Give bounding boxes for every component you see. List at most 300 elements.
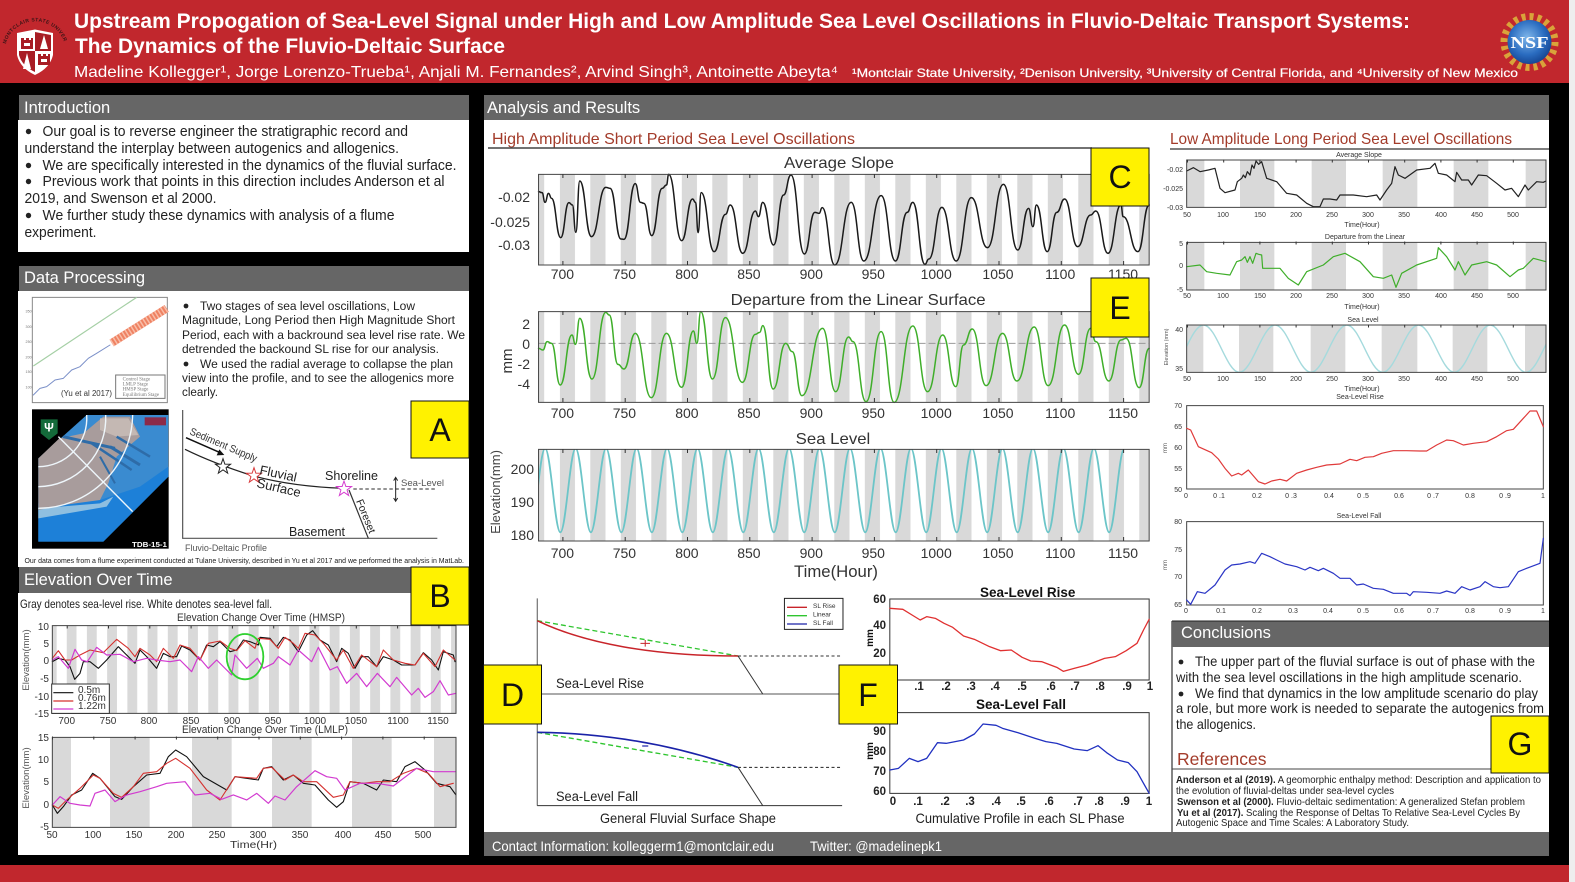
chart: sea level high amplitude: 750 [613, 545, 636, 561]
diagram: fluvio-deltaic profile: Basement [289, 524, 345, 539]
chart: average slope low amplitude: 200 [1290, 212, 1302, 219]
chart: average slope high amplitude [490, 155, 1149, 282]
chart: sea level high amplitude: Time(Hour) [794, 563, 878, 581]
text: conclusions bullets: the allogenics. [1176, 717, 1256, 732]
text: introduction bullets: Previous work that points in this direction includes Anderson et al [42, 174, 444, 190]
diagram: fluvio-deltaic profile: Sea-Level [401, 478, 444, 489]
chart: departure from the linear low amplitude: 50 [1183, 293, 1191, 300]
text: data processing bullets: clearly. [182, 385, 218, 399]
heading: introduction: Introduction [24, 99, 110, 117]
chart: elevation change LMLP: 100 [85, 830, 102, 841]
panel: conclusions and references [1172, 621, 1549, 832]
text: introduction bullets [24, 124, 456, 241]
text: introduction bullets: experiment. [24, 225, 96, 241]
chart: cumulative profile sea-level rise: .6 [1046, 681, 1056, 693]
title: Upstream Propogation of Sea-Level Signal under High and Low Amplitude Sea Level Oscillations in Fluvio-Deltaic Transport Systems: [74, 9, 1410, 33]
chart: departure from the linear low amplitude: 100 [1217, 293, 1229, 300]
text: conclusions bullets [1175, 654, 1544, 732]
contact bar [484, 832, 1549, 856]
chart: average slope low amplitude: 150 [1254, 212, 1266, 219]
text: data processing bullets: Two stages of sea level oscillations, Low [200, 299, 415, 313]
chart: sea level low amplitude: 50 [1183, 376, 1191, 383]
chart: sea-level rise low amplitude: 0 .3 [1285, 493, 1297, 500]
diagram: general fluvial surface shape: General Fluvial Surface Shape [600, 810, 776, 826]
text: conclusions bullets: a role, but more work is needed to separate the autogenics from [1176, 701, 1544, 716]
chart: sea level low amplitude: 450 [1471, 376, 1483, 383]
chart: cumulative profile sea-level fall [865, 697, 1153, 808]
diagram: general fluvial surface shape: Sea-Level Fall [556, 789, 638, 804]
logo: Montclair State University [2, 18, 67, 75]
chart: departure from the linear surface: Departure from the Linear Surface [731, 292, 986, 309]
chart: average slope high amplitude: 1050 [982, 266, 1014, 282]
diagram: fluvio-deltaic profile: Fluvio-Deltaic Profile [185, 543, 267, 553]
chart: departure from the linear surface: mm [499, 348, 516, 374]
diagram: fluvio-deltaic profile [183, 410, 444, 553]
chart: departure from the linear low amplitude: 250 [1326, 293, 1338, 300]
chart: sea level high amplitude: Sea Level [796, 431, 870, 448]
chart: elevation change HMSP: 10 [38, 622, 49, 633]
chart: cumulative profile sea-level fall: .6 [1044, 796, 1054, 808]
chart: sea level high amplitude: 200 [511, 461, 534, 477]
chart: sea level high amplitude: 1000 [921, 545, 952, 561]
chart: sea-level fall low amplitude [1163, 513, 1545, 615]
chart: elevation change LMLP: Elevation(mm) [21, 747, 32, 809]
chart: elevation change HMSP: -5 [40, 674, 49, 685]
chart: elevation change HMSP: 900 [224, 716, 241, 727]
chart: sea-level fall low amplitude: 0 .7 [1427, 608, 1439, 615]
chart: sea level stages (Yu et al 2017): 250 [26, 340, 32, 344]
diagram: general fluvial surface shape: SL Rise [813, 603, 836, 610]
text: references list: the evolution of fluvial-deltas under sea-level cycles [1176, 786, 1394, 797]
chart: elevation change HMSP: 1000 [304, 716, 327, 727]
chart: departure from the linear low amplitude: -5 [1177, 287, 1183, 294]
chart: average slope high amplitude: -0.02 [498, 189, 530, 205]
chart: cumulative profile sea-level rise: .1 [914, 681, 924, 693]
chart: departure from the linear surface: 1100 [1045, 405, 1075, 421]
label box G: G [1508, 726, 1532, 762]
chart: sea-level rise low amplitude: 0.4 [1324, 493, 1334, 500]
chart: elevation change HMSP: 0 [43, 656, 49, 667]
chart: departure from the linear surface: 700 [551, 405, 574, 421]
chart: elevation change LMLP [21, 724, 456, 851]
chart: departure from the linear surface: 2 [522, 316, 530, 332]
chart: cumulative profile sea-level fall: 90 [873, 726, 886, 738]
top banner [0, 0, 1569, 83]
chart: sea-level rise low amplitude: 0 .9 [1499, 493, 1511, 500]
chart: cumulative profile sea-level fall: .1 [913, 796, 923, 808]
chart: elevation change LMLP: 50 [46, 830, 58, 841]
chart: sea-level rise low amplitude: 60 [1174, 445, 1182, 452]
chart: sea level high amplitude: 180 [511, 527, 534, 543]
chart: departure from the linear low amplitude: Time(Hour) [1344, 304, 1380, 311]
chart: sea level high amplitude [488, 431, 1149, 581]
chart: average slope low amplitude: 450 [1471, 212, 1483, 219]
chart: average slope high amplitude: 900 [800, 266, 823, 282]
chart: departure from the linear surface: 750 [613, 405, 636, 421]
chart: sea level high amplitude: 850 [737, 545, 761, 561]
chart: average slope high amplitude: 1150 [1108, 266, 1138, 282]
chart: sea level low amplitude: 400 [1435, 376, 1447, 383]
label box F: F [858, 677, 878, 713]
chart: sea level low amplitude: Sea Level [1347, 317, 1379, 324]
chart: cumulative profile sea-level fall: .8 [1094, 796, 1104, 808]
panel: introduction [18, 95, 469, 252]
chart: departure from the linear surface: 950 [862, 405, 885, 421]
chart: cumulative profile sea-level rise: 1 [1147, 681, 1154, 693]
chart: average slope high amplitude: 850 [737, 266, 761, 282]
chart: sea-level fall low amplitude: 0.6 [1394, 608, 1404, 615]
chart: sea-level fall low amplitude: 0.1 [1216, 608, 1226, 615]
chart: cumulative profile sea-level rise: Sea-Level Rise [980, 585, 1076, 600]
chart: sea-level rise low amplitude: 50 [1174, 487, 1182, 494]
chart: sea-level fall low amplitude: 0.2 [1252, 608, 1262, 615]
chart: departure from the linear surface: 900 [800, 405, 823, 421]
chart: sea-level rise low amplitude: 65 [1174, 424, 1182, 431]
chart: elevation change LMLP: 200 [168, 830, 185, 841]
photo: flume experiment plan view: Ψ [44, 421, 54, 435]
heading: introduction [19, 95, 469, 120]
chart: cumulative profile sea-level rise: .2 [941, 681, 951, 693]
chart: sea-level rise low amplitude: 0 [1184, 493, 1188, 500]
chart: cumulative profile sea-level fall: Sea-Level Fall [976, 697, 1066, 712]
chart: cumulative profile sea-level rise: 40 [873, 620, 886, 632]
chart: average slope low amplitude: 500 [1507, 212, 1519, 219]
chart: elevation change LMLP: -5 [40, 822, 49, 833]
chart: sea level high amplitude: 800 [675, 545, 699, 561]
chart: sea level high amplitude: 900 [800, 545, 823, 561]
chart: sea-level fall low amplitude: 0.3 [1288, 608, 1298, 615]
chart: sea level stages (Yu et al 2017): 300 [26, 325, 32, 329]
chart: sea-level rise low amplitude: 0.6 [1394, 493, 1404, 500]
chart: sea level high amplitude: Elevation(mm) [488, 450, 503, 534]
diagram: general fluvial surface shape [537, 598, 843, 826]
chart: sea-level fall low amplitude: 75 [1174, 547, 1182, 554]
chart: sea level high amplitude: 1150 [1108, 545, 1138, 561]
label box D [484, 665, 542, 724]
chart: departure from the linear surface: 0 [522, 336, 530, 352]
chart: sea-level rise low amplitude: 0 .1 [1213, 493, 1225, 500]
chart: sea level low amplitude: 40 [1175, 327, 1183, 334]
chart: elevation change LMLP: 15 [38, 733, 49, 744]
text: data processing bullets: We used the radial average to collapse the plan [200, 357, 453, 371]
chart: cumulative profile sea-level fall: .5 [1016, 796, 1026, 808]
heading: low amplitude long period: Low Amplitude Long Period Sea Level Oscillations [1170, 131, 1512, 148]
chart: average slope low amplitude: 400 [1435, 212, 1447, 219]
chart: sea level high amplitude: 190 [511, 494, 534, 510]
label box B: B [429, 578, 451, 614]
chart: cumulative profile sea-level rise: .3 [966, 681, 976, 693]
chart: sea level high amplitude: 1050 [982, 545, 1014, 561]
chart: cumulative profile sea-level fall: 60 [873, 786, 886, 798]
diagram: fluvio-deltaic profile: Foreset [353, 498, 378, 535]
chart: cumulative profile sea-level fall: .3 [965, 796, 975, 808]
chart: sea-level rise low amplitude: 55 [1174, 466, 1182, 473]
diagram: general fluvial surface shape: SL Fall [813, 620, 834, 627]
heading: data processing [19, 266, 469, 291]
diagram: general fluvial surface shape: Linear [813, 612, 832, 618]
chart: average slope low amplitude [1163, 152, 1546, 229]
affiliations: ¹Montclair State University, ²Denison University, ³University of Central Florida, and ⁴University of New Mexico [852, 66, 1518, 80]
chart: sea-level fall low amplitude: 0 .9 [1499, 608, 1511, 615]
chart: average slope low amplitude: 100 [1217, 212, 1229, 219]
label box E: E [1109, 290, 1131, 326]
chart: sea-level rise low amplitude: 0 .5 [1357, 493, 1369, 500]
text: introduction bullets: We further study these dynamics with analysis of a flume [42, 208, 395, 224]
label box C [1091, 148, 1149, 206]
chart: sea level low amplitude: 500 [1507, 376, 1519, 383]
diagram: fluvio-deltaic profile: Fluvial [258, 462, 298, 485]
chart: average slope low amplitude: Time(Hour) [1344, 222, 1380, 229]
chart: cumulative profile sea-level rise [865, 585, 1154, 693]
chart: sea-level fall low amplitude: 0 .5 [1357, 608, 1369, 615]
chart: average slope high amplitude: 1100 [1045, 266, 1075, 282]
chart: elevation change HMSP: 800 [141, 716, 158, 727]
chart: elevation change HMSP: 700 [58, 716, 75, 727]
chart: departure from the linear low amplitude: 5 [1179, 241, 1183, 248]
chart: sea level stages (Yu et al 2017): 150 [26, 370, 32, 374]
chart: average slope high amplitude: 950 [862, 266, 885, 282]
text: data processing bullets: Period, each with a backround sea level rise rate. We [182, 328, 465, 342]
label box A [411, 401, 469, 458]
chart: elevation change LMLP: 400 [335, 830, 352, 841]
chart: sea level high amplitude: 950 [862, 545, 885, 561]
panel: analysis and results [484, 95, 1562, 856]
chart: elevation change HMSP: -15 [35, 709, 49, 720]
chart: cumulative profile sea-level fall: .2 [940, 796, 950, 808]
label box G [1491, 716, 1549, 773]
chart: sea level stages (Yu et al 2017): Control Stage [123, 377, 151, 382]
chart: average slope high amplitude: -0.03 [498, 237, 530, 253]
chart: departure from the linear low amplitude: 450 [1471, 293, 1483, 300]
chart: sea level low amplitude: 150 [1254, 376, 1266, 383]
chart: sea level stages (Yu et al 2017): Equilibrium Stage [123, 393, 160, 398]
chart: sea level low amplitude: 350 [1398, 376, 1410, 383]
chart: cumulative profile sea-level rise: .5 [1017, 681, 1027, 693]
chart: sea-level fall low amplitude: 0 [1184, 608, 1188, 615]
chart: cumulative profile sea-level fall: mm [865, 742, 876, 760]
chart: sea level stages (Yu et al 2017): HMSP Stage [123, 388, 149, 393]
chart: sea level low amplitude: 300 [1362, 376, 1374, 383]
chart: sea-level fall low amplitude: Sea-Level Fall [1337, 513, 1382, 520]
chart: average slope high amplitude: 750 [613, 266, 636, 282]
chart: elevation change HMSP: -10 [35, 692, 49, 703]
heading: data processing: Data Processing [24, 269, 145, 287]
authors: Madeline Kollegger¹, Jorge Lorenzo-Trueba¹, Anjali M. Fernandes², Arvind Singh³, Antoinette Abeyta⁴ [74, 64, 838, 81]
text: introduction bullets: understand the interplay between autogenics and allogenics. [24, 141, 399, 157]
text: references list [1176, 775, 1541, 829]
chart: elevation change HMSP: Elevation(mm) [21, 629, 32, 691]
chart: average slope low amplitude: 300 [1362, 212, 1374, 219]
chart: elevation change HMSP [21, 612, 456, 727]
chart: cumulative profile sea-level fall: .7 [1073, 796, 1083, 808]
chart: cumulative profile sea-level rise: mm [865, 629, 876, 647]
chart: departure from the linear low amplitude: 500 [1507, 293, 1519, 300]
footnote: data source: Our data comes from a flume experiment conducted at Tulane University, described in Yu et al 2017 and we performed the analysis in MatLab. [24, 556, 464, 565]
chart: departure from the linear low amplitude: 350 [1398, 293, 1410, 300]
chart: average slope low amplitude: -0.025 [1163, 186, 1183, 193]
heading: conclusions: Conclusions [1181, 624, 1271, 642]
chart: average slope low amplitude: 50 [1183, 212, 1191, 219]
chart: elevation change HMSP: 5 [43, 639, 49, 650]
chart: cumulative profile sea-level rise: 60 [873, 594, 886, 606]
chart: elevation change HMSP: 950 [265, 716, 282, 727]
chart: sea level stages (Yu et al 2017): 100 [26, 385, 32, 389]
chart: sea level high amplitude: 700 [551, 545, 574, 561]
chart: sea-level rise low amplitude: 0.2 [1252, 493, 1262, 500]
text: references list: Autogenic Space and Time Scales: A Laboratory Study. [1176, 818, 1409, 829]
photo: flume experiment plan view [32, 409, 169, 549]
chart: sea level stages (Yu et al 2017): 200 [26, 355, 32, 359]
chart: departure from the linear surface: 800 [675, 405, 699, 421]
chart: departure from the linear low amplitude: 0 [1179, 263, 1183, 270]
chart: sea-level rise low amplitude: 0.8 [1465, 493, 1475, 500]
text: gray and white legend note: Gray denotes sea-level rise. White denotes sea-level fall. [20, 597, 272, 611]
chart: cumulative profile sea-level fall: 0 [890, 796, 896, 808]
chart: sea level low amplitude: 100 [1217, 376, 1229, 383]
label box D: D [501, 677, 524, 713]
heading: elevation over time: Elevation Over Time [24, 571, 173, 589]
text: conclusions bullets: The upper part of the fluvial surface is out of phase with the [1195, 654, 1535, 669]
chart: elevation change LMLP: 300 [250, 830, 267, 841]
chart: elevation change HMSP: 1150 [427, 716, 449, 727]
diagram: fluvio-deltaic profile: Sediment Supply [188, 426, 259, 465]
chart: departure from the linear low amplitude [1177, 234, 1546, 311]
chart: departure from the linear low amplitude: 200 [1290, 293, 1302, 300]
label box B [411, 567, 469, 625]
chart: cumulative profile sea-level fall: .4 [991, 796, 1001, 808]
chart: elevation change HMSP: 1050 [345, 716, 368, 727]
title: The Dynamics of the Fluvio-Deltaic Surface [75, 34, 505, 58]
chart: sea-level rise low amplitude [1163, 394, 1545, 500]
chart: sea level low amplitude [1164, 317, 1562, 393]
chart: cumulative profile sea-level rise: .7 [1070, 681, 1080, 693]
title [74, 9, 1410, 58]
text: data processing bullets: detrended the backound SL rise for our analysis. [182, 342, 439, 356]
chart: cumulative profile sea-level rise: .8 [1095, 681, 1105, 693]
diagram: fluvio-deltaic profile: Surface [255, 475, 302, 500]
chart: cumulative profile sea-level rise: .4 [990, 681, 1000, 693]
chart: sea-level rise low amplitude: 70 [1174, 403, 1182, 410]
panel: elevation over time [18, 567, 469, 855]
label box F [839, 665, 898, 724]
heading: high amplitude short period: High Amplitude Short Period Sea Level Oscillations [492, 131, 855, 148]
text: references list: Yu et al (2017). Scaling the Response of Deltas To Relative Sea-Level Cycles By [1177, 808, 1521, 819]
text: data processing bullets [182, 299, 465, 399]
label box A: A [429, 412, 451, 448]
heading: analysis and results [484, 95, 1549, 120]
chart: departure from the linear surface: -4 [518, 376, 530, 392]
chart: departure from the linear surface: 1000 [921, 405, 952, 421]
heading: references: References [1177, 749, 1267, 769]
contact bar: Twitter: @madelinepk1 [810, 838, 942, 854]
chart: elevation change HMSP: Elevation Change Over Time (HMSP) [177, 612, 345, 624]
chart: sea-level rise low amplitude: Sea-Level Rise [1336, 394, 1384, 401]
text: introduction bullets: We are specifically interested in the dynamics of the fluvial surface. [42, 158, 456, 174]
heading: analysis and results: Analysis and Results [487, 99, 640, 117]
label box C: C [1108, 159, 1132, 195]
chart: elevation change HMSP: 1.22m [78, 701, 106, 712]
chart: departure from the linear surface: 850 [737, 405, 761, 421]
chart: cumulative profile sea-level fall: .9 [1120, 796, 1130, 808]
chart: cumulative profile sea-level fall: 1 [1146, 796, 1153, 808]
bottom banner [0, 865, 1569, 882]
chart: sea level low amplitude: 200 [1290, 376, 1302, 383]
chart: sea-level fall low amplitude: mm [1163, 560, 1169, 570]
chart: elevation change LMLP: 250 [209, 830, 226, 841]
text: introduction bullets: 2019, and Swenson et al 2000. [24, 191, 216, 207]
text: introduction bullets: Our goal is to reverse engineer the stratigraphic record and [42, 124, 408, 140]
chart: sea level high amplitude: 1100 [1045, 545, 1075, 561]
chart: departure from the linear low amplitude: 300 [1362, 293, 1374, 300]
chart: average slope high amplitude: 1000 [921, 266, 952, 282]
chart: cumulative profile sea-level rise: 20 [873, 648, 886, 660]
chart: average slope low amplitude: -0.02 [1167, 167, 1183, 174]
chart: sea level stages (Yu et al 2017) [26, 297, 167, 403]
diagram: general fluvial surface shape: Sea-Level Rise [556, 676, 644, 691]
text: references list: Anderson et al (2019). A geomorphic enthalpy method: Description and application to [1176, 775, 1541, 786]
chart: average slope low amplitude: -0.03 [1167, 205, 1183, 212]
chart: sea level low amplitude: 35 [1175, 366, 1183, 373]
chart: sea level stages (Yu et al 2017): LMLP Stage [123, 382, 149, 387]
text: data processing bullets: view into the profile, and to see the allogenics more [182, 371, 454, 385]
chart: departure from the linear surface: 1150 [1108, 405, 1138, 421]
contact bar: Contact Information: kolleggerm1@montclair.edu [492, 838, 774, 854]
caption: cumulative profile: Cumulative Profile in each SL Phase [916, 810, 1125, 826]
chart: departure from the linear surface: -2 [518, 356, 530, 372]
heading: conclusions [1172, 621, 1549, 647]
chart: sea-level fall low amplitude: 80 [1174, 519, 1182, 526]
logo: NSF: NSF [1510, 33, 1548, 52]
chart: sea level low amplitude: 250 [1326, 376, 1338, 383]
chart: sea-level rise low amplitude: 1 [1541, 493, 1545, 500]
chart: sea-level fall low amplitude: 0.4 [1323, 608, 1333, 615]
chart: sea level stages (Yu et al 2017): 350 [26, 310, 32, 314]
text: conclusions bullets: We find that dynamics in the low amplitude scenario do play [1195, 686, 1538, 701]
chart: elevation change HMSP: 0.76m [78, 693, 106, 704]
chart: average slope high amplitude: 700 [551, 266, 574, 282]
chart: departure from the linear surface: 1050 [982, 405, 1014, 421]
chart: departure from the linear low amplitude: Departure from the Linear [1325, 234, 1406, 241]
text: references list: Swenson et al (2000). Fluvio-deltaic sedimentation: A generalized Stefan problem [1177, 797, 1525, 808]
chart: elevation change LMLP: 350 [292, 830, 309, 841]
chart: departure from the linear low amplitude: 150 [1254, 293, 1266, 300]
chart: elevation change LMLP: 0 [43, 800, 49, 811]
logo: NSF [1504, 16, 1555, 68]
chart: sea-level rise low amplitude: 0 .7 [1427, 493, 1439, 500]
chart: elevation change LMLP: 5 [43, 777, 49, 788]
chart: elevation change LMLP: 500 [415, 830, 432, 841]
chart: cumulative profile sea-level fall: 70 [873, 766, 886, 778]
chart: elevation change LMLP: 10 [38, 755, 49, 766]
chart: elevation change HMSP: 0.5m [78, 685, 100, 696]
right page edge [1569, 0, 1575, 882]
chart: average slope low amplitude: Average Slope [1336, 152, 1382, 159]
diagram: fluvio-deltaic profile: Shoreline [325, 468, 378, 483]
chart: sea-level fall low amplitude: 65 [1174, 602, 1182, 609]
photo: flume experiment plan view: TDB-15-1 [132, 540, 168, 549]
text: conclusions bullets: with the sea level oscillations in the high amplitude scenario. [1175, 670, 1522, 685]
chart: departure from the linear low amplitude: 400 [1435, 293, 1447, 300]
label box E [1091, 278, 1149, 337]
chart: elevation change HMSP: 850 [183, 716, 200, 727]
chart: sea-level fall low amplitude: 70 [1174, 574, 1182, 581]
chart: average slope high amplitude: 800 [675, 266, 699, 282]
chart: elevation change HMSP: 750 [100, 716, 117, 727]
chart: average slope high amplitude: Average Slope [784, 155, 894, 172]
panel: data processing [18, 266, 469, 567]
chart: sea level stages (Yu et al 2017): (Yu et al 2017) [61, 389, 112, 398]
chart: cumulative profile sea-level fall: 80 [873, 746, 886, 758]
